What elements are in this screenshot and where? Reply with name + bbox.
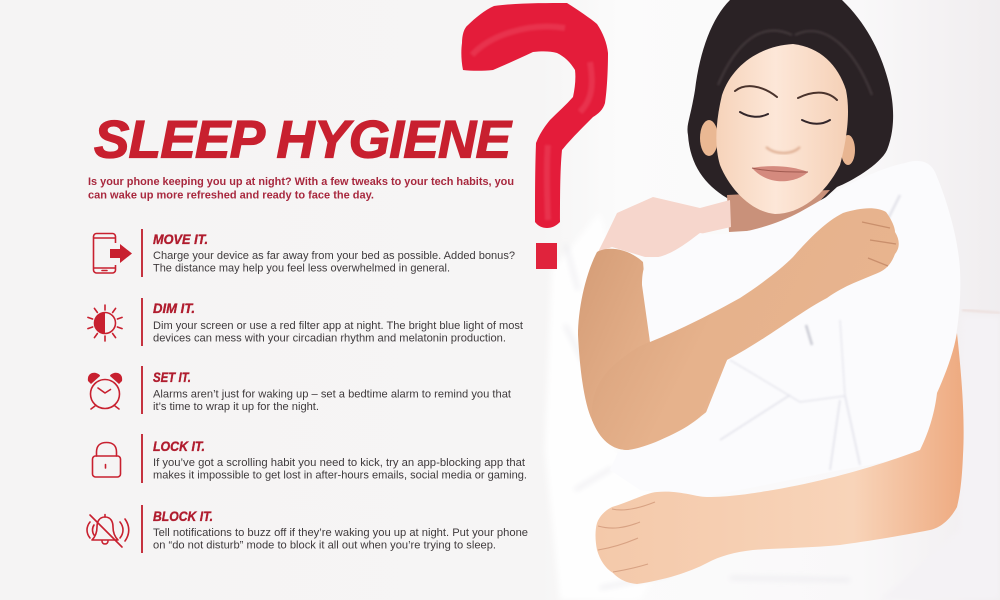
intro text: can wake up more refreshed and ready to face the day. (88, 190, 374, 202)
eyebrows (735, 86, 837, 100)
body text: Dim your screen or use a red filter app at night. The bright blue light of most (153, 320, 524, 332)
title: SLEEP HYGIENE (94, 110, 513, 170)
icon: half sun (88, 305, 122, 341)
icon: padlock (92, 442, 120, 477)
lower arm and hand (596, 333, 964, 584)
forearm and hand on pillow (592, 208, 899, 450)
lips (752, 166, 808, 181)
pillow (610, 161, 960, 498)
body text (153, 320, 524, 344)
pillow folds (720, 195, 900, 470)
heading: DIM IT. (153, 301, 195, 316)
heading: SET IT. (153, 370, 191, 385)
item: set it (88, 366, 512, 414)
bedding (545, 212, 1000, 600)
upper arm (578, 249, 800, 450)
item: block it (87, 505, 528, 553)
body text (153, 250, 515, 274)
body text: devices can mess with your circadian rhythm and melatonin production. (153, 332, 506, 344)
body text: Alarms aren’t just for waking up – set a bedtime alarm to remind you that (153, 388, 512, 400)
body text (153, 527, 528, 552)
finger lines (862, 222, 896, 266)
body text (153, 388, 512, 413)
question mark (461, 3, 608, 269)
photo: woman sleeping hugging a pillow (545, 0, 1000, 600)
item: lock it (92, 434, 527, 483)
divider (141, 366, 143, 414)
body text: Charge your device as far away from your bed as possible. Added bonus? (153, 250, 515, 262)
body text: Tell notifications to buzz off if they’re waking you up at night. Put your phone (153, 527, 528, 539)
heading: LOCK IT. (153, 439, 205, 454)
body text: If you’ve got a scrolling habit you need to kick, try an app-blocking app that (153, 457, 526, 469)
body text: The distance may help you feel less overwhelmed in general. (153, 262, 450, 274)
face (716, 44, 848, 214)
pink t-shirt (598, 197, 731, 257)
body text: makes it impossible to get lost in after-hours emails, social media or gaming. (153, 470, 527, 482)
heading: MOVE IT. (153, 232, 208, 247)
question mark curve (461, 3, 608, 228)
item: move it (94, 229, 515, 277)
item: dim it (88, 298, 524, 346)
nose (766, 147, 800, 153)
hair highlights (718, 31, 872, 95)
question mark dot (536, 243, 557, 269)
divider (141, 434, 143, 483)
icon: muted bell (87, 514, 129, 547)
body text (153, 457, 527, 482)
lower hand finger lines (598, 502, 655, 572)
divider (141, 298, 143, 346)
neck (727, 190, 830, 232)
closed eyes (740, 112, 830, 124)
body text: it’s time to wrap it up for the night. (153, 401, 319, 413)
intro text (88, 176, 514, 202)
intro text: Is your phone keeping you up at night? With a few tweaks to your tech habits, you (88, 176, 514, 188)
icon: phone with arrow (94, 234, 134, 273)
icon: alarm clock (88, 373, 122, 409)
heading: BLOCK IT. (153, 509, 213, 524)
divider (141, 229, 143, 277)
body text: on “do not disturb” mode to block it all out when you’re trying to sleep. (153, 540, 496, 552)
ears (700, 120, 855, 165)
hair (687, 0, 893, 230)
divider (141, 505, 143, 553)
